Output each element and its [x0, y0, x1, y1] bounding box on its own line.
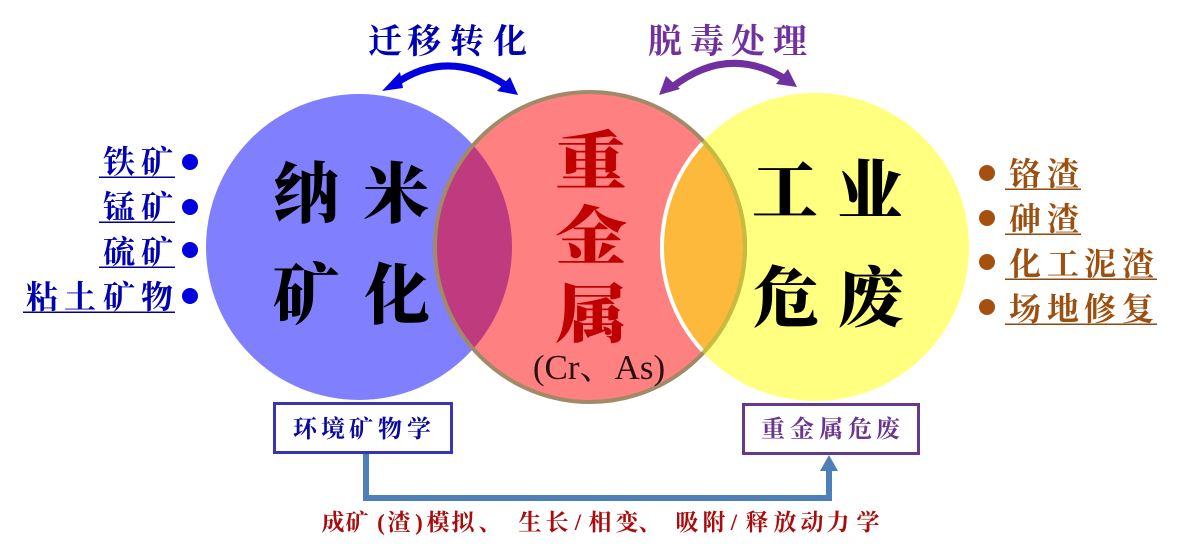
item: sulfide ore: 硫矿 [103, 234, 173, 270]
title: migration and transformation: 迁移转化 [368, 23, 527, 61]
item: chemical sludge: 化工泥渣 [1009, 246, 1154, 282]
venn diagram [206, 92, 969, 402]
item: arsenic slag: 砷渣 [1009, 201, 1079, 237]
item: site remediation: 场地修复 [1009, 291, 1154, 327]
overlap: red and yellow [664, 145, 743, 349]
heading: nano mineralization: 矿化 [273, 260, 430, 333]
box: heavy metal hazard [744, 404, 918, 454]
title: detoxification treatment: 脱毒处理 [648, 23, 807, 61]
heading: industrial hazardous waste: 工业 [752, 156, 903, 229]
circle: nano mineralization [206, 94, 512, 400]
item: clay minerals: 粘土矿物 [26, 279, 173, 315]
box: environmental mineralogy [274, 404, 452, 452]
arrow: migration [382, 66, 518, 95]
heading: heavy metals: 重 [555, 127, 627, 198]
caption: simulation and kinetics: 成矿(渣)模拟、生长/相变、吸附/释放动力学 [322, 509, 880, 535]
heading: heavy metals: 属 [555, 280, 627, 351]
list: wastes [979, 156, 1157, 327]
item: chromium slag: 铬渣 [1009, 156, 1079, 192]
item: iron ore: 铁矿 [103, 144, 173, 180]
item: arsenic slag [979, 201, 1081, 237]
heading: nano mineralization: 纳米 [273, 159, 429, 232]
outline: red circle [435, 92, 745, 402]
outline: yellow circle edge over red [660, 142, 704, 352]
heading: heavy metals: 金 [555, 202, 627, 273]
label: Cr and As: (Cr、As) [533, 348, 665, 387]
box: heavy metal hazard: 重金属危废 [761, 415, 900, 443]
list: minerals [23, 144, 198, 315]
arrow: detoxification [659, 63, 797, 95]
heading: heavy metals [555, 127, 627, 351]
circle: industrial hazardous waste [661, 93, 969, 401]
outline: red circle edge inside yellow [702, 140, 747, 354]
overlap: blue and red [437, 147, 512, 348]
item: chromium slag [979, 156, 1081, 192]
arrow: connector between boxes [366, 454, 838, 498]
box: environmental mineralogy: 环境矿物学 [293, 416, 431, 443]
item: manganese ore: 锰矿 [103, 189, 173, 225]
circle: heavy metals [435, 92, 745, 402]
heading: industrial hazardous waste: 危废 [753, 263, 904, 336]
